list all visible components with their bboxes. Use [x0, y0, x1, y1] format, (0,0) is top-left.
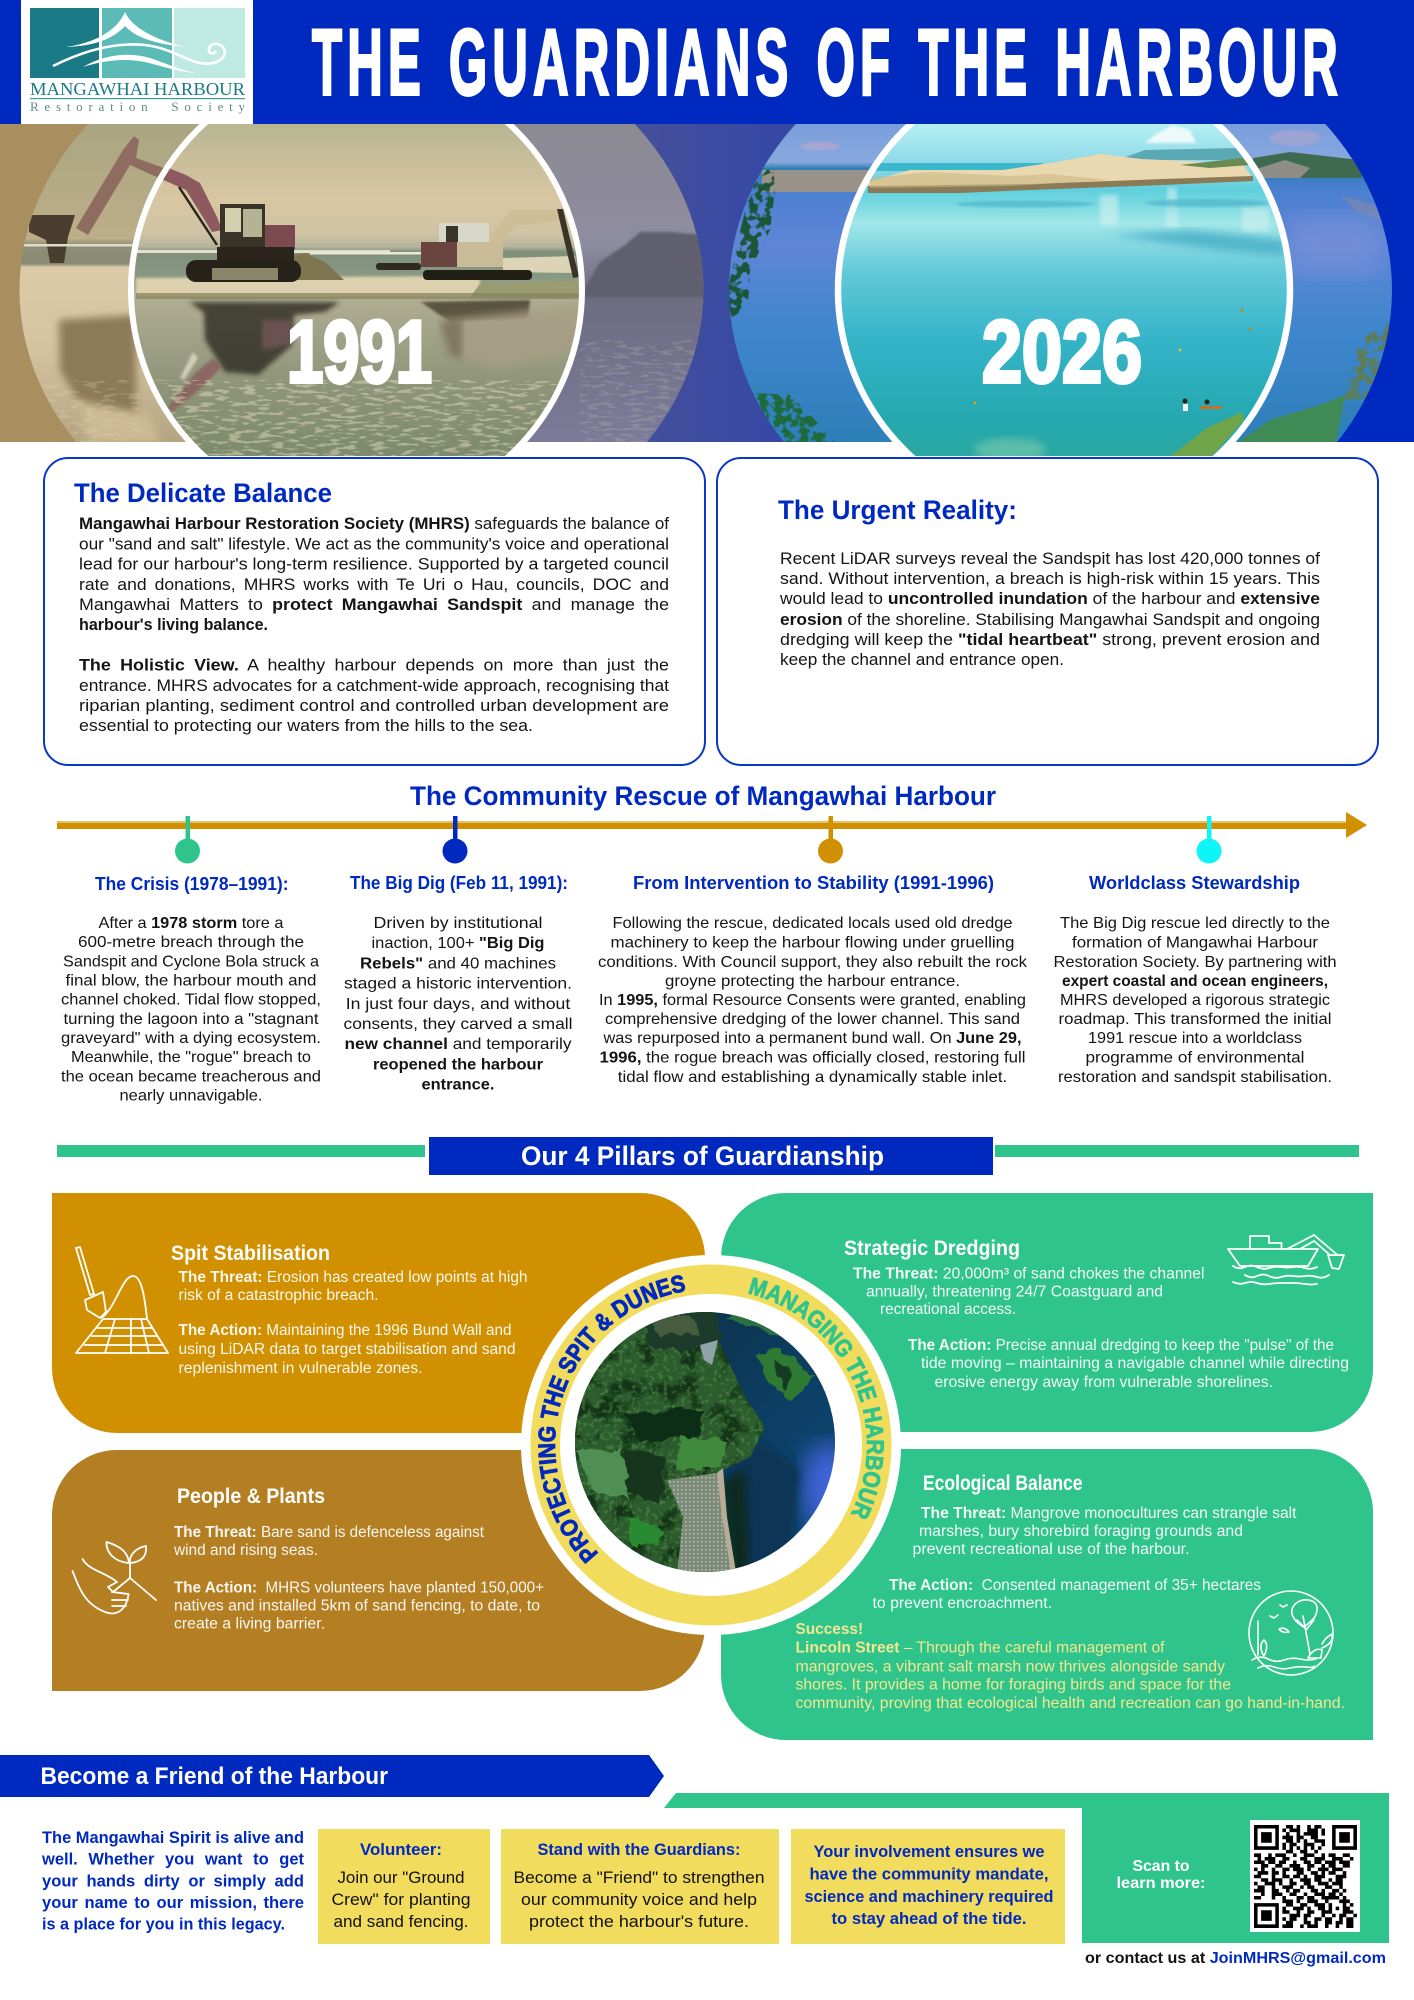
- heading: Spit Stabilisation: [171, 1241, 330, 1265]
- threat and action text: The Action: MHRS volunteers have planted 150,000+: [174, 1580, 544, 1596]
- timeline column: The Crisis: final blow, the harbour mouth and: [66, 972, 316, 989]
- card: Your involvement: Your involvement ensures we: [814, 1843, 1044, 1861]
- card: Volunteer: [318, 1829, 490, 1944]
- heading: Strategic Dredging: [844, 1236, 1020, 1260]
- timeline column: From Intervention to Stability: [598, 873, 1027, 1086]
- threat and action text: [853, 1266, 1349, 1391]
- central ring: [521, 1255, 901, 1635]
- timeline column: From Intervention to Stability: tidal flow and establishing a dynamically stable inlet.: [618, 1069, 1007, 1086]
- timeline pin: crisis: [175, 816, 200, 864]
- icon: hand and seedling: [72, 1542, 156, 1613]
- paragraph: would lead to uncontrolled inundation of the harbour and extensive: [779, 590, 1320, 608]
- holistic view paragraph: [79, 656, 669, 735]
- friend intro text: your hands dirty or simply add: [42, 1872, 304, 1890]
- threat and action text: [178, 1269, 528, 1377]
- timeline column: Worldclass Stewardship: Worldclass Stewardship: [1089, 873, 1300, 893]
- timeline column: From Intervention to Stability: machinery to keep the harbour flowing under gruelling: [610, 934, 1014, 952]
- timeline column: From Intervention to Stability: was repurposed into a permanent bund wall. On June 29,: [602, 1030, 1021, 1047]
- success story text: shores. It provides a home for foraging birds and space for the: [796, 1676, 1231, 1694]
- scan panel: learn more:: [1116, 1875, 1206, 1892]
- card: Your involvement: to stay ahead of the tide.: [832, 1910, 1026, 1928]
- icon: ecosystem globe: [1249, 1591, 1333, 1675]
- section banner: Become a Friend: [0, 1755, 664, 1797]
- paragraph: keep the channel and entrance open.: [780, 651, 1064, 669]
- heading: Ecological Balance: [923, 1471, 1083, 1495]
- friend intro text: is a place for you in this legacy.: [42, 1916, 285, 1934]
- threat and action text: create a living barrier.: [174, 1616, 325, 1632]
- timeline column: Worldclass Stewardship: Restoration Society. By partnering with: [1054, 954, 1336, 971]
- icon: dredging ship: [1228, 1235, 1344, 1284]
- timeline column: From Intervention to Stability: groyne protecting the harbour entrance.: [665, 973, 960, 990]
- photo: 2026 main circle: [830, 124, 1300, 462]
- satellite photo: [575, 1312, 835, 1572]
- header band: [0, 0, 1414, 124]
- scan panel: Scan to: [1132, 1858, 1190, 1875]
- panel: The Delicate Balance: [44, 458, 705, 765]
- section banner: Become a Friend: Become a Friend of the Harbour: [40, 1763, 388, 1790]
- timeline column: The Crisis: 600-metre breach through the: [78, 934, 304, 951]
- timeline column: The Big Dig: new channel and temporarily: [344, 1036, 572, 1053]
- panel: Spit Stabilisation: [52, 1193, 705, 1433]
- panel: People & Plants: [52, 1450, 705, 1691]
- ring label: managing: MANAGING THE HARBOUR: [748, 1277, 884, 1519]
- success story text: Lincoln Street – Through the careful management of: [796, 1640, 1165, 1656]
- success story text: [796, 1621, 1345, 1712]
- card: Volunteer: Crew" for planting: [332, 1890, 470, 1909]
- excavator right: [376, 209, 579, 280]
- threat and action text: The Threat: 20,000m³ of sand chokes the channel: [853, 1266, 1204, 1282]
- threat and action text: annually, threatening 24/7 Coastguard and: [866, 1284, 1163, 1300]
- threat and action text: marshes, bury shorebird foraging grounds and: [919, 1523, 1243, 1540]
- intro paragraph: our "sand and salt" lifestyle. We act as the community's voice and operational: [79, 536, 669, 554]
- paragraph: Recent LiDAR surveys reveal the Sandspit has lost 420,000 tonnes of: [780, 550, 1320, 568]
- timeline column: The Crisis: nearly unnavigable.: [120, 1087, 262, 1104]
- timeline column: Worldclass Stewardship: formation of Mangawhai Harbour: [1072, 934, 1318, 952]
- threat and action text: The Threat: Mangrove monocultures can strangle salt: [921, 1505, 1297, 1522]
- threat and action text: The Action: Consented management of 35+ hectares: [889, 1577, 1261, 1594]
- holistic view paragraph: entrance. MHRS advocates for a catchment-wide approach, recognising that: [79, 677, 669, 695]
- timeline column: The Big Dig: Driven by institutional: [374, 915, 542, 932]
- timeline column: The Crisis: [61, 874, 321, 1104]
- panel: The Urgent Reality: [717, 458, 1378, 765]
- timeline column: The Crisis: channel choked. Tidal flow stopped,: [61, 992, 321, 1009]
- timeline column: The Big Dig: In just four days, and without: [346, 996, 571, 1013]
- heading: The Urgent Reality:: [778, 495, 1017, 525]
- timeline column: The Big Dig: staged a historic intervention.: [344, 976, 572, 993]
- intro paragraph: Mangawhai Harbour Restoration Society (MHRS) safeguards the balance of: [79, 515, 669, 533]
- card: Your involvement: [791, 1829, 1065, 1944]
- threat and action text: recreational access.: [880, 1301, 1016, 1318]
- card: Volunteer: and sand fencing.: [334, 1912, 468, 1931]
- card: Stand with the Guardians: our community voice and help: [521, 1890, 757, 1909]
- threat and action text: natives and installed 5km of sand fencing, to date, to: [174, 1598, 540, 1614]
- logo: [21, 0, 253, 124]
- paragraph: erosion of the shoreline. Stabilising Mangawhai Sandspit and ongoing: [780, 611, 1320, 629]
- card: Stand with the Guardians: protect the harbour's future.: [529, 1912, 749, 1931]
- success story text: Success!: [796, 1621, 863, 1638]
- timeline column: Worldclass Stewardship: The Big Dig rescue led directly to the: [1060, 915, 1330, 932]
- success story text: mangroves, a vibrant salt marsh now thrives alongside sandy: [796, 1658, 1225, 1676]
- panel: Ecological Balance: [721, 1449, 1373, 1740]
- timeline column: Worldclass Stewardship: expert coastal and ocean engineers,: [1062, 973, 1328, 990]
- threat and action text: to prevent encroachment.: [872, 1595, 1052, 1612]
- holistic view paragraph: essential to protecting our waters from the hills to the sea.: [79, 717, 533, 735]
- timeline column: The Big Dig: The Big Dig (Feb 11, 1991):: [350, 873, 568, 893]
- threat and action text: [872, 1505, 1297, 1612]
- timeline column: The Crisis: turning the lagoon into a "stagnant: [64, 1011, 319, 1028]
- timeline column: The Big Dig: entrance.: [422, 1077, 494, 1094]
- timeline column: The Big Dig: inaction, 100+ "Big Dig: [372, 935, 544, 952]
- intro paragraph: lead for our harbour's long-term resilience. Supported by a targeted council: [79, 556, 669, 574]
- threat and action text: replenishment in vulnerable zones.: [178, 1360, 422, 1377]
- threat and action text: The Action: Precise annual dredging to keep the "pulse" of the: [908, 1337, 1334, 1354]
- intro paragraph: harbour's living balance.: [79, 616, 268, 634]
- threat and action text: The Threat: Erosion has created low points at high: [178, 1269, 528, 1286]
- photo: 1991 faded surround: [0, 124, 710, 444]
- threat and action text: wind and rising seas.: [173, 1542, 318, 1559]
- threat and action text: tide moving – maintaining a navigable channel while directing: [921, 1355, 1349, 1372]
- timeline column: Worldclass Stewardship: restoration and sandspit stabilisation.: [1058, 1069, 1332, 1086]
- timeline heading: The Community Rescue of Mangawhai Harbour: [410, 781, 996, 811]
- contact line: or contact us at JoinMHRS@gmail.com: [1085, 1950, 1386, 1967]
- threat and action text: The Threat: Bare sand is defenceless against: [174, 1524, 485, 1541]
- timeline column: The Crisis: graveyard" with a dying ecosystem.: [61, 1030, 321, 1047]
- card: Stand with the Guardians: Stand with the Guardians:: [538, 1841, 740, 1859]
- timeline column: The Crisis: The Crisis (1978–1991):: [95, 874, 288, 894]
- pillars banner: [57, 1137, 1359, 1175]
- timeline pin: intervention: [818, 816, 843, 864]
- threat and action text: prevent recreational use of the harbour.: [912, 1541, 1190, 1558]
- timeline column: From Intervention to Stability: In 1995, formal Resource Consents were granted, enabling: [599, 992, 1026, 1009]
- photo: 1991 main circle: [120, 124, 600, 456]
- paragraph: sand. Without intervention, a breach is high-risk within 15 years. This: [780, 570, 1320, 588]
- ring label: protecting: PROTECTING THE SPIT & DUNES: [538, 1275, 686, 1564]
- friend intro text: well. Whether you want to get: [41, 1851, 304, 1869]
- threat and action text: The Action: Maintaining the 1996 Bund Wall and: [178, 1322, 512, 1339]
- timeline column: From Intervention to Stability: Following the rescue, dedicated locals used old dredge: [612, 915, 1013, 932]
- year: 1991: 1991: [287, 302, 432, 401]
- timeline column: From Intervention to Stability: conditions. With Council support, they also rebuilt the rock: [598, 954, 1027, 971]
- friend intro text: [41, 1829, 304, 1934]
- timeline column: The Big Dig: [344, 873, 572, 1094]
- timeline column: The Big Dig: consents, they carved a small: [344, 1016, 572, 1033]
- paragraph: dredging will keep the "tidal heartbeat" strong, prevent erosion and: [780, 631, 1320, 649]
- logo: Restoration Society: [30, 99, 246, 114]
- heading: People & Plants: [177, 1484, 325, 1508]
- icon: shovel and dune: [76, 1247, 168, 1353]
- intro paragraph: rate and donations, MHRS works with Te Uri o Hau, councils, DOC and: [79, 576, 669, 594]
- photo band: [0, 124, 1414, 456]
- timeline pin: big dig: [442, 816, 468, 864]
- timeline arrow: [57, 812, 1367, 838]
- card: Your involvement: have the community mandate,: [810, 1866, 1048, 1884]
- timeline column: Worldclass Stewardship: 1991 rescue into a worldclass: [1088, 1030, 1302, 1047]
- timeline column: The Crisis: After a 1978 storm tore a: [98, 915, 284, 932]
- intro paragraph: [79, 515, 669, 634]
- timeline column: Worldclass Stewardship: MHRS developed a rigorous strategic: [1060, 992, 1330, 1009]
- timeline column: From Intervention to Stability: From Intervention to Stability (1991-1996): [633, 873, 994, 893]
- card: Volunteer: Volunteer:: [360, 1841, 442, 1859]
- threat and action text: risk of a catastrophic breach.: [178, 1287, 378, 1304]
- panel: Strategic Dredging: [721, 1193, 1373, 1432]
- threat and action text: [173, 1524, 544, 1632]
- friend intro text: The Mangawhai Spirit is alive and: [42, 1829, 304, 1847]
- QR code: [1250, 1820, 1360, 1932]
- excavator left: [163, 168, 301, 282]
- heading: The Delicate Balance: [74, 478, 332, 508]
- card: Your involvement: science and machinery required: [804, 1888, 1054, 1906]
- holistic view paragraph: The Holistic View. A healthy harbour depends on more than just the: [79, 656, 669, 674]
- photo: 2026 faded surround: [720, 124, 1410, 444]
- timeline column: Worldclass Stewardship: roadmap. This transformed the initial: [1058, 1011, 1332, 1028]
- intro paragraph: Mangawhai Matters to protect Mangawhai Sandspit and manage the: [79, 596, 669, 614]
- timeline column: The Big Dig: Rebels" and 40 machines: [360, 955, 556, 972]
- pillars banner: Our 4 Pillars of Guardianship: [521, 1141, 884, 1171]
- timeline column: The Big Dig: reopened the harbour: [373, 1056, 543, 1073]
- timeline column: The Crisis: Meanwhile, the "rogue" breach to: [71, 1049, 311, 1066]
- card: Volunteer: Join our "Ground: [338, 1868, 464, 1887]
- water reflections: [130, 300, 580, 456]
- timeline pin: stewardship: [1196, 816, 1222, 864]
- year: 2026: 2026: [982, 302, 1142, 401]
- success story text: community, proving that ecological health and recreation can go hand-in-hand.: [796, 1695, 1345, 1712]
- card: Stand with the Guardians: [501, 1829, 779, 1944]
- holistic view paragraph: riparian planting, sediment control and controlled urban development are: [79, 697, 669, 715]
- timeline column: The Crisis: the ocean became treacherous and: [61, 1068, 321, 1085]
- timeline column: Worldclass Stewardship: programme of environmental: [1086, 1050, 1304, 1066]
- timeline column: From Intervention to Stability: 1996, the rogue breach was officially closed, restoring full: [600, 1050, 1026, 1066]
- card: Stand with the Guardians: Become a "Friend" to strengthen: [514, 1868, 764, 1887]
- threat and action text: erosive energy away from vulnerable shorelines.: [934, 1374, 1273, 1391]
- scan panel: [664, 1793, 1389, 1943]
- timeline column: From Intervention to Stability: comprehensive dredging of the lower channel. This sand: [605, 1011, 1020, 1028]
- timeline column: Worldclass Stewardship: [1054, 873, 1336, 1086]
- threat and action text: using LiDAR data to target stabilisation and sand: [178, 1341, 516, 1358]
- timeline column: The Crisis: Sandspit and Cyclone Bola struck a: [63, 953, 319, 970]
- paragraph: [779, 550, 1320, 669]
- logo: MANGAWHAI HARBOUR: [30, 79, 245, 99]
- friend intro text: your name to our mission, there: [42, 1894, 304, 1912]
